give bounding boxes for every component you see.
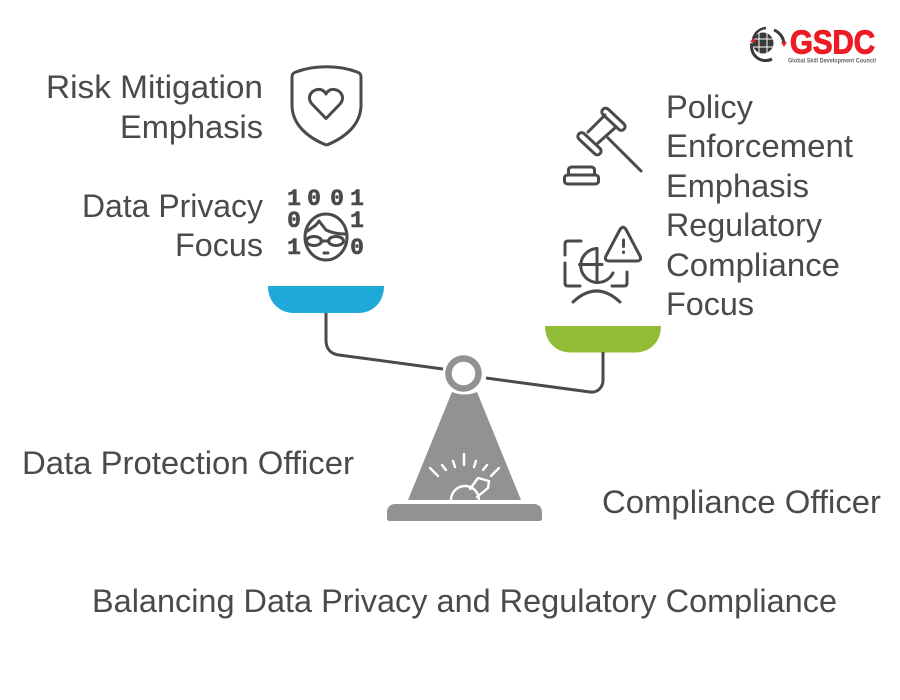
label: Compliance Officer: Compliance Officer (602, 484, 881, 520)
text: Policy Enforcement Emphasis (666, 89, 853, 204)
logo: GSDC: Global Skill Development Council (788, 58, 876, 64)
text: Data Privacy Focus (82, 188, 264, 263)
bowl: left blue (268, 286, 384, 313)
icon: shield with heart (292, 67, 361, 145)
text: Risk Mitigation Emphasis: Emphasis (120, 109, 263, 145)
text: Risk Mitigation Emphasis (46, 69, 263, 145)
scale pivot ring (448, 358, 478, 388)
logo: GSDC: GSDC (790, 24, 875, 60)
balance beam arm: left (326, 313, 443, 369)
icon: binary digits and face with glasses: 1 (350, 208, 364, 234)
icon: gavel (564, 107, 641, 184)
icon: binary digits and face with glasses (287, 186, 364, 261)
logo: GSDC (750, 24, 876, 64)
icon: binary digits and face with glasses: 1 (287, 186, 301, 212)
scale stand with gauge (387, 392, 542, 521)
icon: binary digits and face with glasses: 0 (287, 208, 301, 234)
text: Data Privacy Focus: Data Privacy (82, 188, 264, 224)
text: Risk Mitigation Emphasis: Risk Mitigation (46, 69, 263, 105)
icon: binary digits and face with glasses: 0 (307, 186, 321, 212)
bowl: right green (545, 326, 661, 352)
text: Data Privacy Focus: Focus (175, 227, 263, 263)
text: Regulatory Compliance Focus: Compliance (666, 247, 840, 283)
icon: warning and globe scan (565, 227, 641, 302)
icon: binary digits and face with glasses: 0 (330, 186, 344, 212)
title: Balancing Data Privacy and Regulatory Compliance (92, 583, 837, 619)
icon: binary digits and face with glasses: 1 (287, 235, 301, 261)
text: Regulatory Compliance Focus: Focus (666, 286, 754, 322)
text: Regulatory Compliance Focus (666, 207, 840, 322)
text: Policy Enforcement Emphasis: Emphasis (666, 168, 809, 204)
label: Data Protection Officer: Data Protection Officer (22, 445, 354, 481)
text: Policy Enforcement Emphasis: Policy (666, 89, 754, 125)
text: Policy Enforcement Emphasis: Enforcement (666, 128, 853, 164)
balance beam arm: right (486, 352, 603, 392)
icon: binary digits and face with glasses: 0 (350, 235, 364, 261)
text: Regulatory Compliance Focus: Regulatory (666, 207, 823, 243)
icon: binary digits and face with glasses: 1 (350, 186, 364, 212)
